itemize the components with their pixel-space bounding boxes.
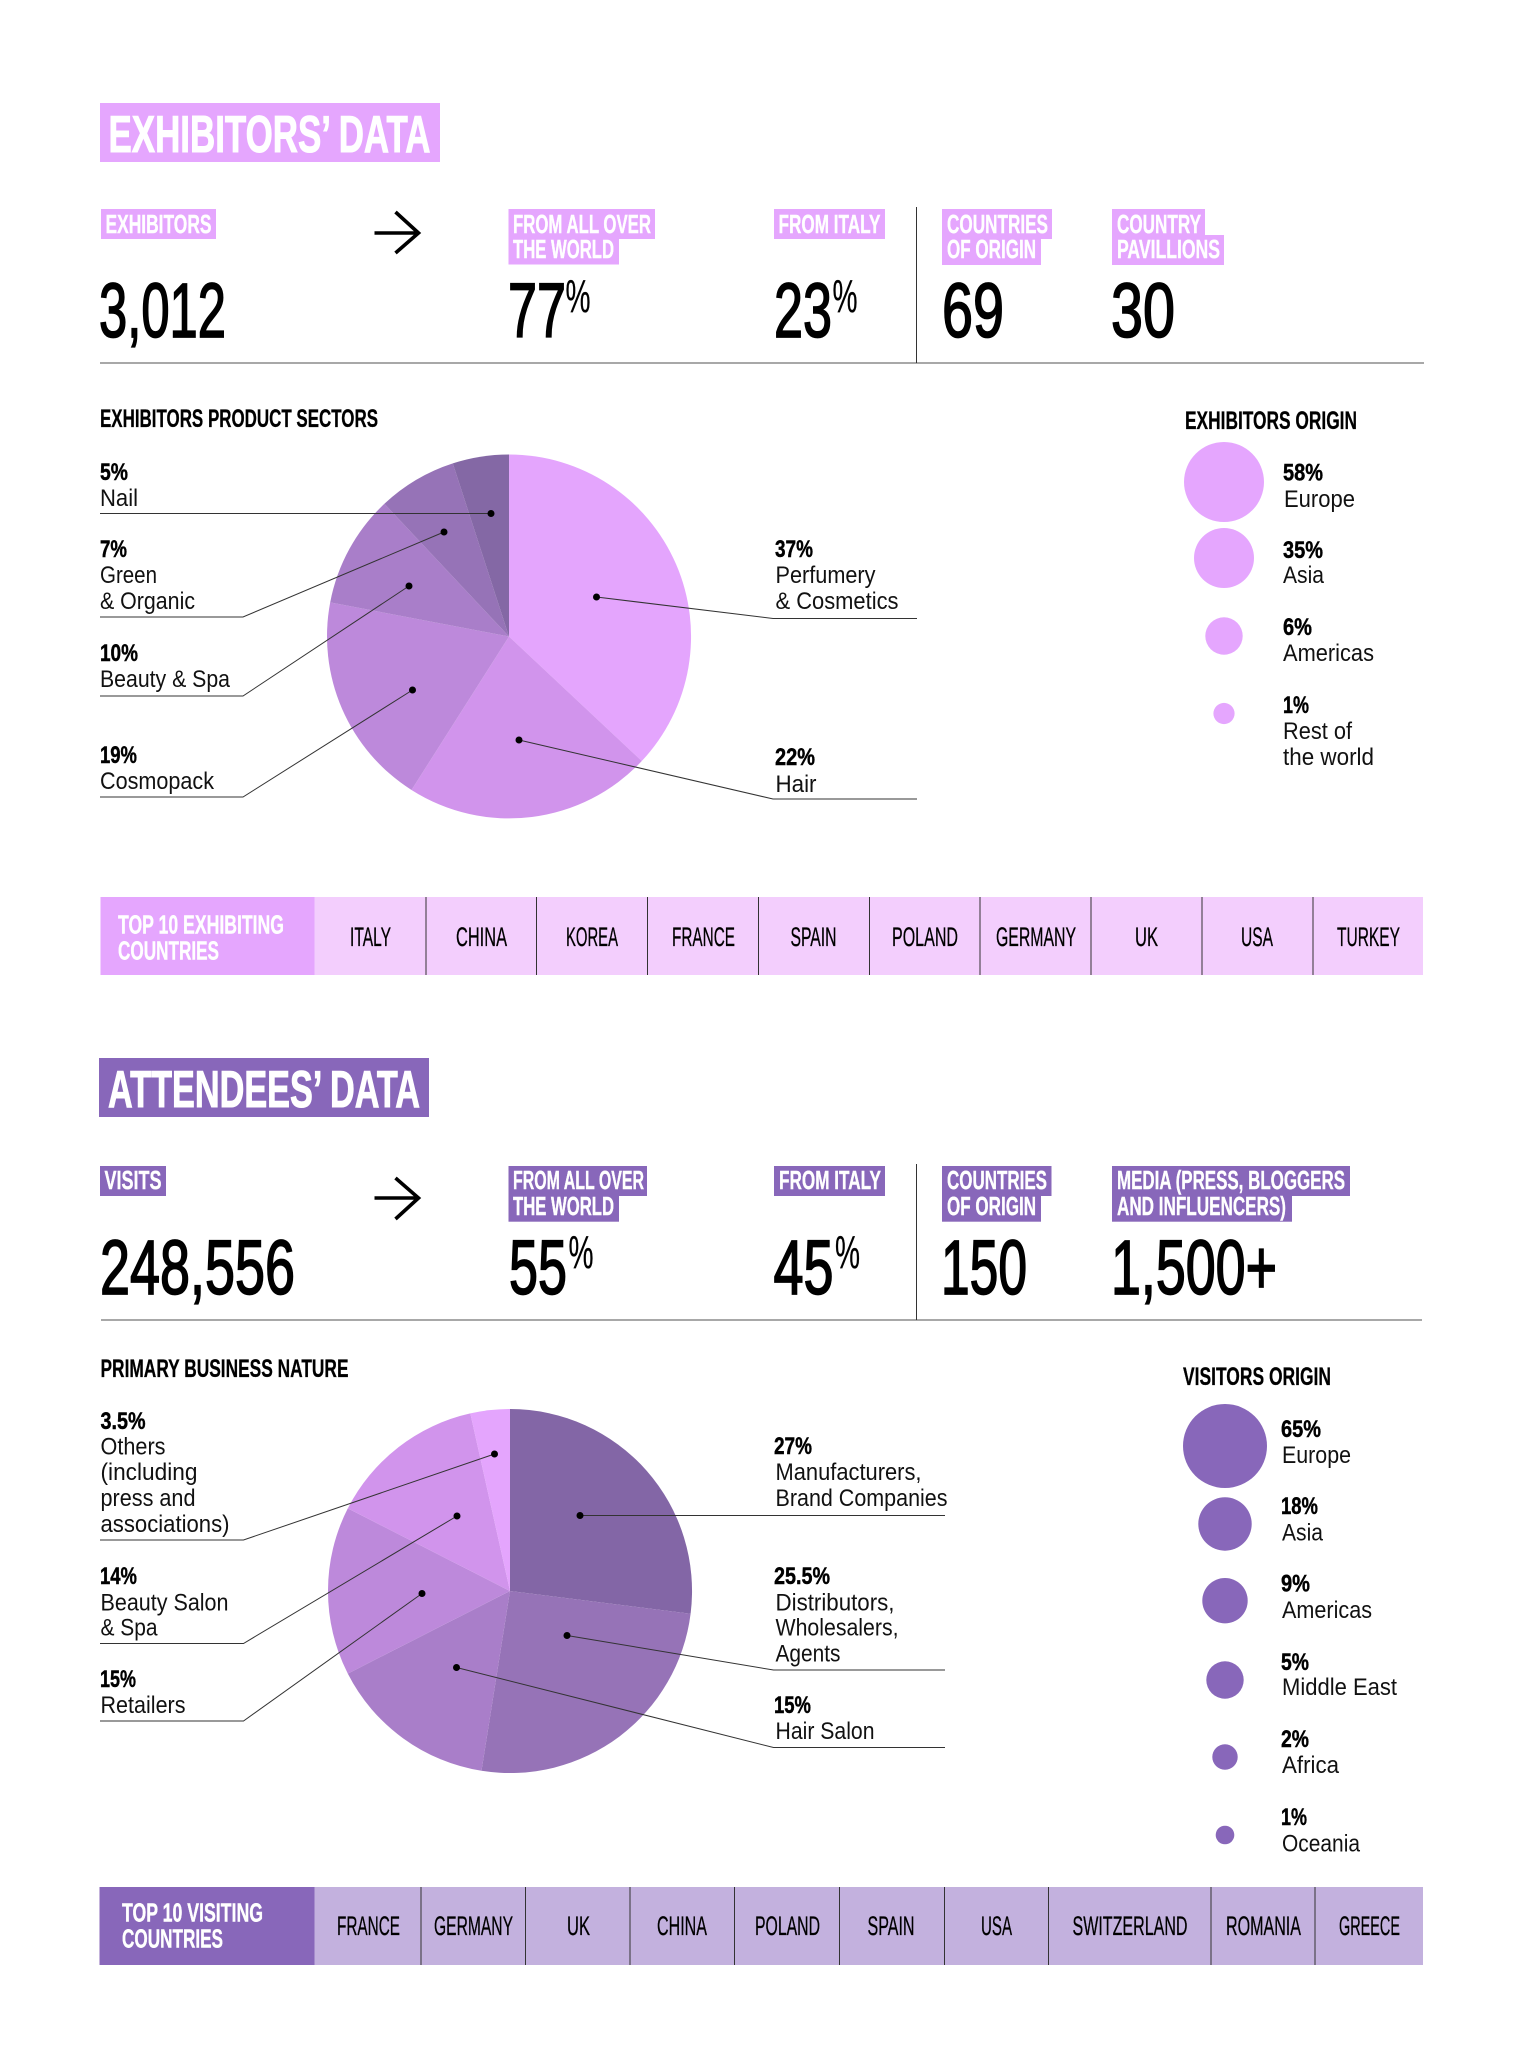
callout: 25.5% distributors: Distributors, — [776, 1590, 894, 1616]
bubble: asia 18% — [1198, 1493, 1323, 1551]
strip: top 10 exhibiting countries: COUNTRIES — [118, 936, 219, 966]
bubble: africa 2% — [1212, 1726, 1339, 1779]
callout: 3.5% others: 3.5% — [100, 1408, 146, 1435]
bubble: asia 35% — [1194, 528, 1324, 589]
callout: 37% perfumery and cosmetics — [593, 536, 917, 618]
stat: from italy 23% — [774, 209, 885, 354]
stat: visits 248,556: VISITS — [104, 1165, 162, 1195]
legend: visitors origin bubbles — [1183, 1404, 1397, 1858]
callout: 25.5% distributors: Wholesalers, — [776, 1614, 898, 1642]
stat: media 1,500+ — [1111, 1165, 1350, 1311]
callout: 7% green and organic: & Organic — [100, 588, 195, 615]
stat: exhibitors 3,012 — [99, 209, 226, 354]
bubble: oceania 1% — [1216, 1804, 1360, 1858]
legend: exhibitors origin bubbles — [1184, 442, 1374, 771]
strip: top 10 exhibiting countries: TURKEY — [1337, 922, 1400, 952]
strip: top 10 exhibiting countries: CHINA — [456, 922, 507, 952]
callout: 7% green and organic — [100, 528, 448, 617]
strip: top 10 exhibiting countries: FRANCE — [672, 922, 735, 952]
bubble: middle east 5%: Middle East — [1282, 1674, 1397, 1701]
strip: top 10 visiting countries: TOP 10 VISITING — [122, 1898, 263, 1928]
stat: from all over the world 77% — [508, 209, 655, 354]
bubble: asia 35%: 35% — [1283, 537, 1323, 564]
stat: media 1,500+: MEDIA (PRESS, BLOGGERS — [1117, 1165, 1345, 1195]
callout: 19% cosmopack: Cosmopack — [100, 768, 215, 795]
callout: 27% manufacturers — [576, 1433, 948, 1519]
callout: 15% hair salon — [453, 1664, 945, 1748]
stat: from all over the world 77%: % — [566, 270, 590, 322]
bubble: oceania 1%: 1% — [1281, 1804, 1307, 1831]
bubble: middle east 5%: 5% — [1281, 1649, 1309, 1676]
strip: top 10 exhibiting countries: UK — [1135, 922, 1158, 952]
bubble: asia 18%: 18% — [1281, 1493, 1318, 1520]
strip: top 10 visiting countries: POLAND — [755, 1911, 820, 1941]
stat: from italy 45%: 45 — [774, 1225, 834, 1311]
callout: 5% nail: Nail — [100, 485, 138, 512]
stat: from italy 23%: FROM ITALY — [778, 209, 880, 239]
bubble: asia 18%: Asia — [1282, 1520, 1323, 1546]
callout: 5% nail: 5% — [100, 459, 128, 486]
callout: 22% hair — [516, 736, 917, 799]
callout: 14% beauty salon and spa: 14% — [100, 1563, 137, 1590]
callout: 14% beauty salon and spa: & Spa — [100, 1614, 158, 1642]
bubble: africa 2%: 2% — [1281, 1726, 1309, 1753]
bubble: africa 2%: Africa — [1282, 1752, 1339, 1779]
bubble: americas 6%: Americas — [1283, 640, 1374, 667]
bubble: oceania 1%: Oceania — [1282, 1830, 1360, 1858]
strip: top 10 visiting countries: UK — [567, 1911, 590, 1941]
stat: country pavillions 30 — [1111, 209, 1224, 354]
stat: country pavillions 30: 30 — [1111, 268, 1175, 354]
callout: 27% manufacturers: Brand Companies — [776, 1485, 948, 1512]
callout: 37% perfumery and cosmetics: & Cosmetics — [776, 588, 898, 615]
bubble: europe 65% — [1183, 1404, 1351, 1488]
callout: 22% hair: 22% — [775, 744, 815, 771]
callout: 15% retailers: 15% — [100, 1666, 136, 1693]
bubble: americas 6% — [1205, 614, 1374, 667]
stat: countries of origin 69 — [942, 209, 1052, 354]
bubble: americas 9%: 9% — [1281, 1570, 1310, 1598]
strip: top 10 visiting countries: USA — [981, 1911, 1012, 1941]
pie chart: exhibitors product sectors — [327, 454, 691, 818]
callout: 27% manufacturers: Manufacturers, — [776, 1459, 922, 1486]
callout: 37% perfumery and cosmetics: 37% — [775, 536, 813, 563]
bubble: rest of the world 1%: 1% — [1283, 692, 1309, 719]
strip: top 10 visiting countries: GERMANY — [434, 1911, 513, 1941]
callout: 15% retailers — [100, 1590, 426, 1721]
stat: media 1,500+: 1,500+ — [1111, 1225, 1277, 1311]
heading: attendees' data — [99, 1058, 429, 1119]
stat: from all over the world 55%: 55 — [509, 1225, 567, 1311]
stat: visits 248,556 — [100, 1165, 295, 1311]
callout: 3.5% others: Others — [100, 1434, 166, 1460]
icon: arrow — [374, 1178, 418, 1219]
stat: from all over the world 77%: THE WORLD — [513, 234, 614, 264]
callout: 7% green and organic: 7% — [100, 536, 127, 563]
bubble: americas 9% — [1202, 1570, 1372, 1624]
stat: country pavillions 30: PAVILLIONS — [1117, 234, 1220, 264]
heading: attendees' data: ATTENDEES’ DATA — [108, 1061, 420, 1119]
bubble: rest of the world 1% — [1213, 692, 1374, 771]
callout: 10% beauty and spa: Beauty & Spa — [100, 666, 230, 693]
stat: from all over the world 77%: FROM ALL OVER — [513, 209, 651, 239]
bubble: rest of the world 1%: Rest of — [1283, 718, 1352, 745]
heading: exhibitors' data: EXHIBITORS’ DATA — [108, 106, 430, 164]
heading: primary business nature: PRIMARY BUSINESS NATURE — [100, 1355, 348, 1383]
callout: 10% beauty and spa: 10% — [100, 640, 138, 667]
stat: from all over the world 55%: THE WORLD — [513, 1191, 614, 1221]
bubble: europe 65%: 65% — [1281, 1416, 1321, 1443]
strip: top 10 visiting countries — [100, 1887, 1423, 1965]
strip: top 10 visiting countries: ROMANIA — [1226, 1911, 1301, 1941]
strip: top 10 exhibiting countries: GERMANY — [996, 922, 1076, 952]
stat: from italy 23%: % — [832, 270, 858, 322]
callout: 19% cosmopack: 19% — [100, 742, 137, 769]
stat: from italy 45% — [774, 1165, 885, 1311]
icon: arrow — [374, 212, 418, 253]
stat: media 1,500+: AND INFLUENCERS) — [1117, 1191, 1286, 1221]
callout: 37% perfumery and cosmetics: Perfumery — [776, 562, 876, 589]
strip: top 10 exhibiting countries: ITALY — [350, 922, 391, 952]
strip: top 10 exhibiting countries: KOREA — [566, 922, 618, 952]
callout: 25.5% distributors — [564, 1563, 945, 1670]
strip: top 10 visiting countries: CHINA — [657, 1911, 707, 1941]
heading: exhibitors product sectors: EXHIBITORS PRODUCT SECTORS — [100, 405, 378, 433]
stat: countries of origin 150 — [941, 1165, 1052, 1311]
bubble: middle east 5% — [1206, 1649, 1397, 1701]
stat: countries of origin 69: OF ORIGIN — [947, 234, 1036, 264]
stat: from italy 23%: 23 — [774, 268, 832, 354]
heading: exhibitors' data — [100, 103, 440, 164]
callout: 3.5% others: (including — [100, 1459, 198, 1486]
strip: top 10 visiting countries: SPAIN — [868, 1911, 914, 1941]
strip: top 10 exhibiting countries: USA — [1241, 922, 1273, 952]
callout: 5% nail — [100, 459, 494, 517]
callout: 19% cosmopack — [100, 686, 416, 797]
callout: 15% hair salon: Hair Salon — [776, 1718, 874, 1745]
callout: 3.5% others — [100, 1408, 498, 1540]
stat: countries of origin 69: COUNTRIES — [947, 209, 1048, 239]
stat: from all over the world 77%: 77 — [508, 268, 566, 354]
callout: 15% retailers: Retailers — [100, 1692, 186, 1719]
strip: top 10 exhibiting countries: SPAIN — [790, 922, 836, 952]
stat: from all over the world 55% — [508, 1165, 647, 1311]
stat: countries of origin 69: 69 — [942, 268, 1004, 354]
stat: from all over the world 55%: FROM ALL OVER — [513, 1165, 644, 1195]
pie chart: primary business nature — [328, 1409, 692, 1773]
strip: top 10 exhibiting countries: TOP 10 EXHIBITING — [118, 910, 284, 940]
strip: top 10 exhibiting countries — [100, 897, 1423, 975]
callout: 14% beauty salon and spa — [100, 1512, 460, 1644]
stat: exhibitors 3,012: 3,012 — [99, 268, 226, 354]
strip: top 10 visiting countries: SWITZERLAND — [1072, 1911, 1188, 1941]
callout: 3.5% others: press and — [100, 1485, 196, 1512]
callout: 25.5% distributors: Agents — [776, 1640, 840, 1668]
stat: exhibitors 3,012: EXHIBITORS — [106, 209, 212, 239]
bubble: europe 58%: Europe — [1284, 486, 1355, 513]
stat: from italy 45%: FROM ITALY — [779, 1165, 881, 1195]
stat: country pavillions 30: COUNTRY — [1117, 209, 1201, 239]
bubble: americas 9%: Americas — [1282, 1597, 1372, 1624]
bubble: rest of the world 1%: the world — [1283, 744, 1374, 771]
section: exhibitors data — [99, 103, 1424, 975]
heading: exhibitors origin: EXHIBITORS ORIGIN — [1185, 407, 1357, 435]
callout: 25.5% distributors: 25.5% — [774, 1563, 830, 1590]
strip: top 10 visiting countries: GREECE — [1339, 1911, 1400, 1941]
stat: from all over the world 55%: % — [568, 1226, 594, 1278]
bubble: europe 58% — [1184, 442, 1355, 522]
callout: 3.5% others: associations) — [100, 1511, 230, 1538]
bubble: europe 65%: Europe — [1282, 1442, 1351, 1469]
bubble: asia 35%: Asia — [1283, 562, 1324, 589]
callout: 15% hair salon: 15% — [774, 1692, 811, 1719]
callout: 27% manufacturers: 27% — [774, 1433, 812, 1460]
callout: 10% beauty and spa — [100, 582, 412, 696]
bubble: americas 6%: 6% — [1283, 614, 1312, 641]
stat: from italy 45%: % — [835, 1226, 860, 1278]
callout: 7% green and organic: Green — [100, 562, 157, 589]
callout: 22% hair: Hair — [776, 771, 816, 798]
stat: visits 248,556: 248,556 — [100, 1225, 295, 1311]
stat: countries of origin 150: COUNTRIES — [947, 1165, 1047, 1195]
bubble: europe 58%: 58% — [1283, 460, 1323, 486]
stat: countries of origin 150: OF ORIGIN — [947, 1191, 1036, 1221]
heading: visitors origin: VISITORS ORIGIN — [1183, 1363, 1331, 1391]
section: attendees data — [99, 1058, 1423, 1965]
callout: 14% beauty salon and spa: Beauty Salon — [100, 1590, 228, 1616]
strip: top 10 visiting countries: FRANCE — [337, 1911, 400, 1941]
strip: top 10 exhibiting countries: POLAND — [892, 922, 958, 952]
strip: top 10 visiting countries: COUNTRIES — [122, 1924, 223, 1954]
stat: countries of origin 150: 150 — [941, 1225, 1027, 1311]
